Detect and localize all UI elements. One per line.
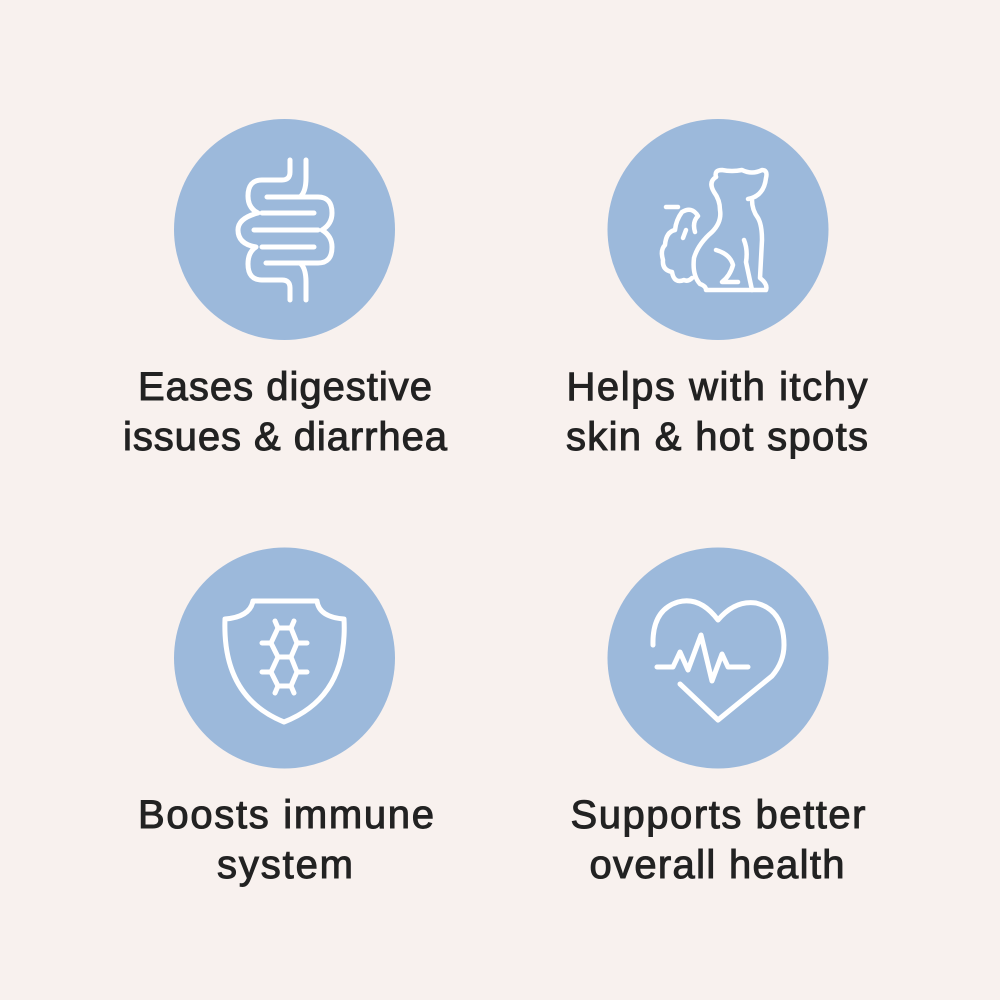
panel: health: overall health [590,843,844,887]
panel: immune [138,548,434,887]
panel: skin: skin & hot spots [566,415,868,459]
heading: immune: Boosts immune [138,793,434,837]
heading: digestive: Eases digestive [138,365,432,409]
icon: shield with molecule [225,601,344,722]
heading: skin: Helps with itchy [566,365,868,409]
panel: digestive [123,119,448,459]
icon: dog scratching [662,170,766,290]
icon: intestine [238,160,332,300]
panel: digestive: issues & diarrhea [123,415,448,459]
panel: health [570,548,866,887]
heading: health: Supports better [570,793,866,837]
icon: heart with ECG [653,601,784,720]
icon circle: skin [608,119,828,340]
panel: immune: system [217,843,353,887]
panel: skin [566,119,868,459]
icon circle: health [608,548,828,768]
icon circle: immune [174,548,395,768]
icon circle: digestive [174,119,395,340]
